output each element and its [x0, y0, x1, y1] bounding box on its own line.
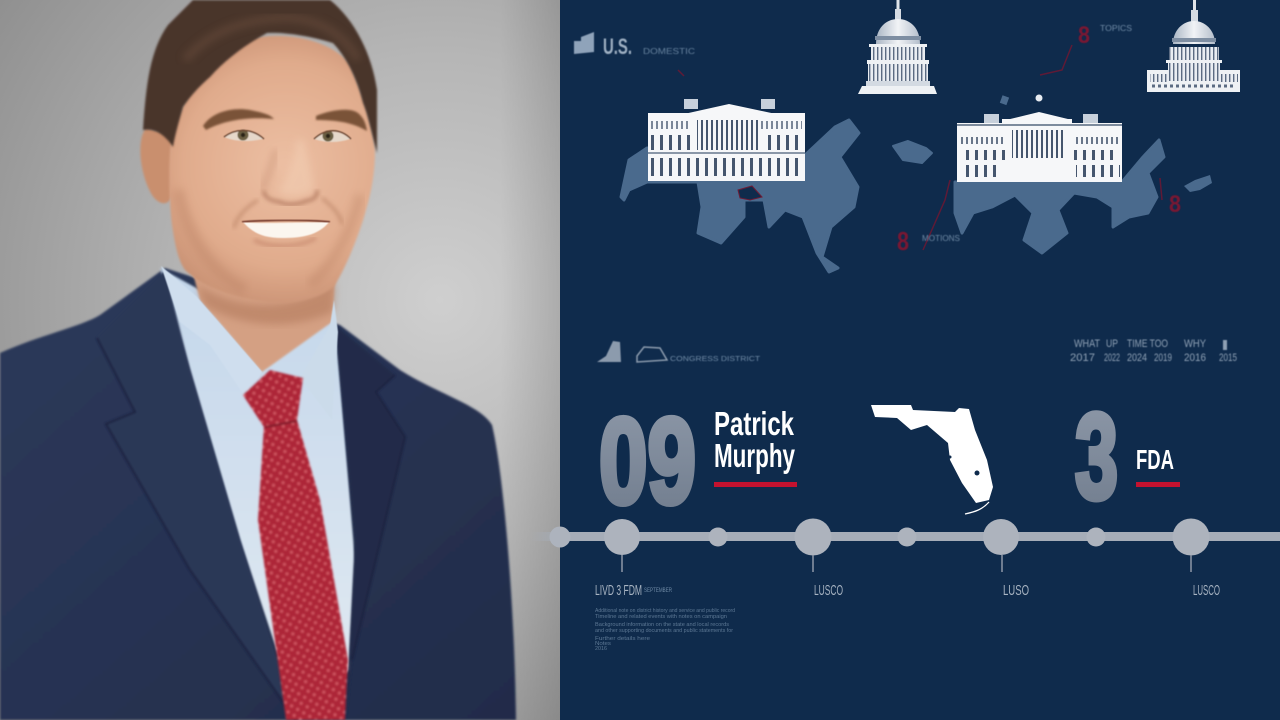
map: small island — [893, 141, 932, 163]
annotation marker: top 8: TOPICS — [1100, 24, 1132, 33]
timeline label 1: LIVD 3 FDM — [595, 582, 642, 599]
annotation marker: lower 8 — [897, 226, 960, 256]
map: left landmass — [621, 120, 859, 272]
right sublabel row: UP — [1106, 338, 1118, 350]
footnote text block: Additional note on district history and service and public record — [595, 608, 735, 614]
annotation marker: top 8: 8 — [1078, 22, 1090, 49]
right sublabel row: TIME TOO — [1127, 338, 1168, 350]
timeline label 4: LUSCO — [1193, 582, 1220, 599]
icon: Florida map — [871, 405, 993, 514]
right sublabel row: 2015 — [1219, 352, 1237, 364]
footnote text block — [595, 608, 735, 652]
annotation: dark blotch on map — [738, 186, 762, 200]
icon: government building left — [648, 99, 805, 181]
label: FDA — [1136, 444, 1180, 487]
smile — [243, 222, 329, 238]
annotation marker: right 8: 8 — [1169, 191, 1181, 218]
small roof details — [1000, 94, 1042, 105]
annotation: red connector lines — [678, 45, 1162, 250]
right sublabel row: 2024 — [1127, 352, 1147, 364]
icon: capitol right — [1147, 0, 1240, 92]
facial features — [178, 109, 367, 290]
annotation marker: top 8 — [1078, 22, 1132, 49]
map: right landmass — [955, 140, 1164, 253]
nose — [278, 140, 314, 196]
right sublabel row: 2019 — [1154, 352, 1172, 364]
face — [169, 36, 375, 303]
eyebrows — [203, 109, 274, 130]
tie — [243, 370, 348, 720]
timeline nodes — [550, 518, 1210, 556]
panel: portrait photo — [0, 0, 560, 720]
ear — [140, 128, 172, 203]
shirt — [160, 268, 355, 720]
annotation marker: lower 8: 8 — [897, 226, 909, 256]
left sublabel row — [597, 341, 760, 363]
right sublabel row: 2017 — [1070, 352, 1095, 364]
hair — [143, 0, 377, 153]
timeline label 1: SEPTEMBER — [644, 588, 672, 594]
heading: U.S. label: DOMESTIC — [643, 47, 695, 56]
footnote text block: and other supporting documents and public statements for — [595, 628, 733, 634]
heading: U.S. label: U.S. — [603, 34, 632, 59]
timeline stems — [622, 555, 1191, 572]
footnote text block: Further details here — [595, 636, 650, 642]
right sublabel row: WHAT — [1074, 338, 1100, 350]
right sublabel row — [1070, 338, 1237, 364]
annotation marker: lower 8: MOTIONS — [922, 234, 960, 243]
panel: navy infographic background — [560, 0, 1280, 720]
right sublabel row: 2022 — [1104, 352, 1120, 364]
name: Patrick Murphy: Murphy — [714, 437, 795, 474]
footnote text block: Notes — [595, 641, 612, 647]
label: FDA: FDA — [1136, 444, 1174, 475]
big number: 09: 09 — [599, 393, 696, 529]
jacket — [0, 268, 516, 720]
name: Patrick Murphy: Patrick — [714, 405, 794, 442]
big number: 3: 3 — [1075, 388, 1118, 524]
neck — [190, 262, 335, 372]
map: eastern islet — [1184, 175, 1212, 192]
jacket lapels — [97, 270, 405, 720]
footnote text block: Background information on the state and local records — [595, 622, 730, 628]
timeline label 2: LUSCO — [814, 582, 843, 599]
footnote text block: 2016 — [595, 646, 607, 652]
right sublabel row: WHY — [1184, 338, 1207, 350]
footnote text block: Timeline and related events with notes on campaign — [595, 614, 727, 620]
cheek shading — [178, 190, 245, 290]
collar — [161, 266, 338, 420]
left sublabel row: CONGRESS DISTRICT — [670, 354, 760, 363]
timeline — [530, 518, 1280, 572]
eyes — [224, 130, 351, 142]
heading: U.S. label — [574, 32, 695, 59]
right sublabel row: 2016 — [1184, 352, 1206, 364]
name: Patrick Murphy — [714, 405, 797, 487]
icon: capitol left — [858, 0, 937, 94]
timeline label 3: LUSO — [1003, 582, 1029, 599]
icon: government building right — [957, 112, 1122, 182]
